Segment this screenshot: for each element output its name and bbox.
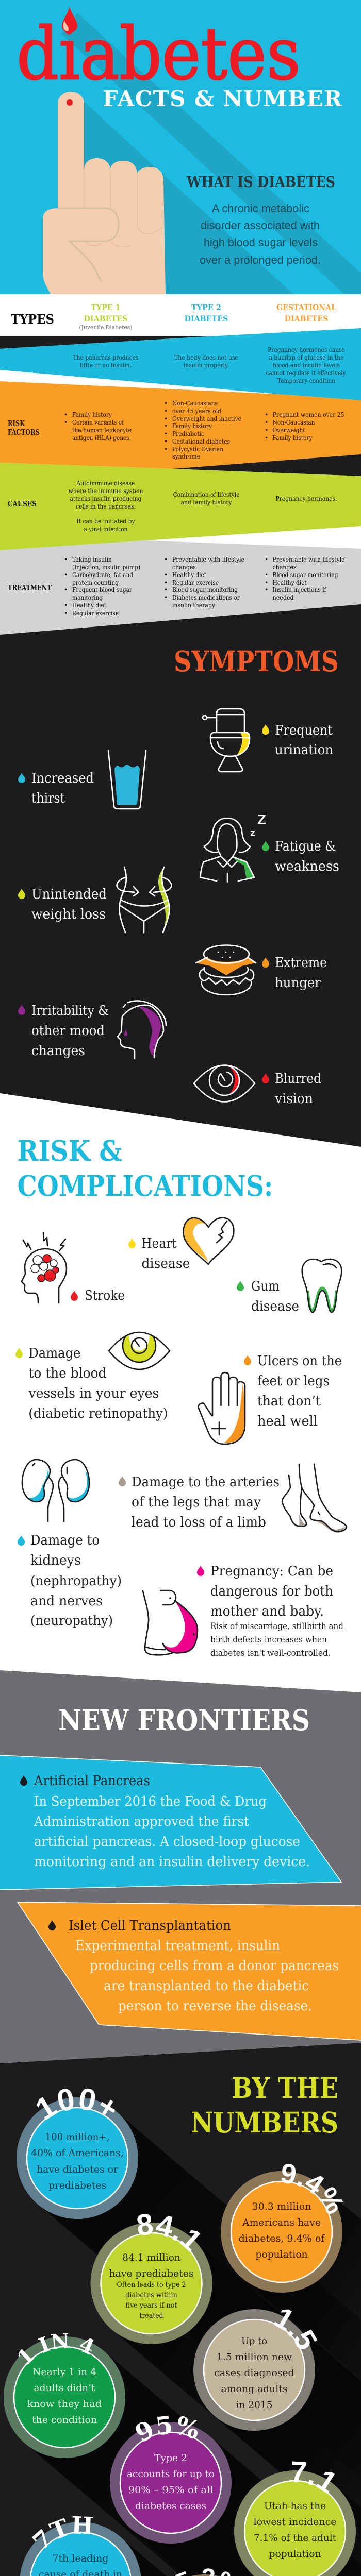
row: treatment: Diabetes medications or [172, 594, 240, 601]
row: risk factors: Gestational diabetes [172, 437, 230, 445]
symptom: blurred vision [262, 1071, 321, 1107]
row: risk factors: • [164, 415, 168, 422]
row: treatment: Carbohydrate, fat and [72, 571, 133, 579]
stat: 9.4%: Americans have [242, 2217, 321, 2228]
complication: damage to kidneys: kidneys [30, 1553, 81, 1568]
row: treatment: • [64, 601, 68, 609]
row label: treatment: TREATMENT [8, 583, 52, 592]
callout: islet cell transplantation: are transplanted to the diabetic [104, 1978, 309, 1994]
row: risk factors: over 45 years old [172, 407, 221, 415]
complication: damage to kidneys: Damage to [30, 1533, 100, 1548]
row: risk factors: • [164, 445, 168, 453]
stat: 1.5: 1.5 [273, 2309, 318, 2349]
row: risk factors: • [164, 430, 168, 437]
icon: burger [196, 945, 256, 995]
callout: islet cell transplantation [18, 1902, 361, 2040]
symptom: irritability: other mood [31, 1023, 105, 1039]
row: treatment: • [265, 571, 268, 579]
row label: risk factors: RISK [8, 419, 25, 428]
row: treatment: Preventable with lifestyle [172, 555, 244, 563]
text block: definition: A chronic metabolic [212, 202, 309, 215]
row: definition of each type: Pregnancy hormones cause [268, 346, 345, 353]
callout: islet cell transplantation: producing cells from a donor pancreas [90, 1958, 339, 1974]
row: treatment: changes [273, 563, 297, 571]
row: risk factors: • [64, 411, 68, 418]
row: risk factors: • [164, 437, 168, 445]
icon: pregnant woman [143, 1590, 198, 1655]
complication: damage to kidneys: and nerves [30, 1594, 103, 1609]
complication: pregnancy: dangerous for both [210, 1584, 333, 1599]
callout: artificial pancreas: artificial pancreas. A closed-loop glucose [34, 1834, 300, 1850]
stat: 7th [20, 2516, 141, 2576]
symptom: blurred vision: Blurred [275, 1071, 321, 1087]
stat: 95%: 90% – 95% of all [128, 2484, 214, 2496]
complication: retinopathy: (diabetic retinopathy) [28, 1406, 168, 1421]
complication: pregnancy [197, 1564, 343, 1658]
symptom: increased thirst: Increased [31, 771, 94, 786]
row: causes: cells in the pancreas. [76, 502, 136, 510]
stat: 9.4%: diabetes, 9.4% of [238, 2233, 325, 2244]
complication: damage to arteries: lead to loss of a limb [132, 1515, 266, 1530]
row: risk factors: Family history [72, 411, 112, 418]
subtitle: FACTS & NUMBER [103, 86, 342, 111]
stat: 95% [110, 2415, 232, 2544]
icon: tired woman: z [250, 827, 255, 839]
complication: gum disease: disease [251, 1299, 299, 1314]
row: treatment: Regular exercise [72, 609, 119, 617]
icon: waist [117, 867, 171, 933]
stat: 1 in 4: 1 IN 4 [19, 2333, 94, 2365]
symptom: frequent urination [262, 723, 333, 758]
stat: 95%: accounts for up to [127, 2468, 215, 2480]
row: treatment: Preventable with lifestyle [273, 555, 345, 563]
heading: what is diabetes: WHAT IS DIABETES [186, 173, 335, 191]
symptom: frequent urination: urination [275, 742, 333, 758]
complication: damage to arteries [119, 1475, 280, 1530]
icon: brain and lightning [22, 1233, 67, 1303]
symptom: fatigue and weakness [262, 839, 339, 874]
complication: ulcers: that don’t [257, 1394, 321, 1409]
heading: gestational diabetes: GESTATIONAL [276, 302, 336, 312]
row: risk factors: • [164, 399, 168, 407]
stat: 95%: 95% [136, 2415, 198, 2442]
heading: type 1 diabetes: TYPE 1 [91, 302, 121, 312]
text block: definition: high blood sugar levels [204, 236, 318, 249]
row: treatment: • [164, 586, 168, 594]
panel: types table [0, 302, 361, 635]
symptom: irritability: changes [31, 1043, 85, 1059]
row: risk factors: Overweight and inactive [172, 415, 241, 422]
complication: retinopathy: to the blood [28, 1366, 106, 1381]
row: definition of each type: insulin properly. [184, 361, 229, 369]
stat: 1.5: cases diagnosed [215, 2367, 294, 2379]
circle long shadows [25, 2112, 361, 2576]
callout: artificial pancreas: monitoring and an insulin delivery device. [34, 1854, 310, 1870]
stat: 7th: 7th leading [53, 2553, 108, 2564]
row label: causes: CAUSES [8, 499, 37, 509]
row: treatment: • [265, 555, 268, 563]
stat: 95%: diabetes cases [135, 2500, 206, 2512]
row: risk factors: the human leukocyte [72, 426, 132, 434]
stat: 95%: Type 2 [154, 2452, 187, 2464]
callout: islet cell transplantation: person to reverse the disease. [118, 1998, 312, 2014]
icon: eye with retinopathy [108, 1331, 170, 1370]
stat: 1.5: in 2015 [236, 2399, 272, 2411]
row: treatment: • [164, 571, 168, 579]
complication: damage to kidneys: (neuropathy) [30, 1613, 113, 1629]
stat: 9.4% [221, 2164, 343, 2293]
row: definition of each type: cannot regulate it effectively. [266, 369, 347, 377]
complication: pregnancy: birth defects increases when [210, 1635, 327, 1645]
stat: 7.1 [234, 2462, 356, 2576]
row: risk factors: Polycystic Ovarian [172, 445, 223, 453]
complication: retinopathy: Damage [28, 1346, 80, 1361]
symptom: frequent urination: Frequent [275, 723, 333, 738]
symptom: increased thirst [18, 771, 94, 806]
complication: damage to kidneys: (nephropathy) [30, 1573, 122, 1589]
callout: artificial pancreas: In September 2016 the Food & Drug [34, 1794, 267, 1809]
row label: risk factors [8, 419, 40, 437]
row: definition of each type: The pancreas produces [73, 353, 138, 361]
row: treatment: Taking insulin [72, 555, 112, 563]
complication: damage to kidneys [18, 1533, 122, 1629]
symptom: irritability: Irritability & [31, 1003, 109, 1019]
row: causes: and family history [180, 498, 232, 506]
symptom: extreme hunger: Extreme [275, 955, 327, 971]
panel: risk and complications [15, 1134, 347, 1658]
row: treatment: needed [273, 594, 294, 601]
stat: 100+: 40% of Americans, [31, 2147, 124, 2159]
callout: islet cell transplantation: Islet Cell Transplantation [69, 1918, 231, 1934]
icon: drop highlight [63, 21, 69, 31]
stat: 100+: 100+ [36, 2089, 116, 2121]
heading: new frontiers: NEW FRONTIERS [58, 1703, 310, 1737]
row: definition of each type: Temporary condition [277, 377, 335, 384]
stat: 1 in 4 [4, 2333, 125, 2458]
icon: hand with ulcer [199, 1372, 245, 1444]
complication: heart disease [128, 1236, 190, 1272]
row: risk factors: • [64, 418, 68, 426]
row: risk factors: syndrome [172, 452, 200, 460]
stat: 84.1: 84.1 [137, 2214, 200, 2252]
row: risk factors: Non-Caucasians [172, 399, 218, 407]
callout: artificial pancreas: Artificial Pancreas [34, 1773, 150, 1789]
stat: 9.4%: 9.4% [282, 2164, 343, 2214]
complication: retinopathy: vessels in your eyes [28, 1386, 159, 1401]
panel: by the numbers [0, 2043, 361, 2576]
complication: damage to arteries: Damage to the arteries [132, 1475, 280, 1490]
text block: definition [200, 202, 321, 266]
stat: 1 in 4: adults didn’t [34, 2382, 95, 2394]
row: treatment: Insulin injections if [273, 586, 327, 594]
heading: type 1 diabetes [79, 302, 132, 331]
stat: 15.2% [175, 2568, 230, 2576]
row: treatment: monitoring [72, 594, 103, 601]
stat: 84.1: diabetes within [125, 2291, 177, 2299]
row: treatment: insulin therapy [172, 601, 216, 609]
row: definition of each type [73, 346, 347, 384]
symptom: extreme hunger: hunger [275, 975, 321, 991]
icon: hand with pricked finger [43, 92, 166, 294]
row: risk factors: • [164, 407, 168, 415]
row: treatment: • [164, 579, 168, 586]
symptom: fatigue and weakness: Fatigue & [275, 839, 336, 854]
icon: blurred eye [194, 1065, 255, 1101]
row: treatment: changes [172, 563, 196, 571]
symptom: blurred vision: vision [274, 1091, 313, 1107]
row: treatment: • [64, 609, 68, 617]
text block: definition: disorder associated with [201, 219, 320, 232]
icon: head with tear [118, 1001, 166, 1059]
callout: artificial pancreas [0, 1755, 341, 1890]
row: risk factors: • [265, 426, 268, 434]
complication: gum disease [237, 1279, 299, 1314]
icon: toilet [203, 709, 250, 772]
stat: 84.1: 84.1 million [122, 2252, 180, 2263]
stat: 7.1: lowest incidence [254, 2516, 336, 2528]
row: risk factors: Certain variants of [72, 418, 124, 426]
row: causes: where the immune system [68, 487, 143, 495]
heading: risk and complications [18, 1134, 273, 1202]
row: causes: Combination of lifestyle [173, 490, 239, 498]
panel: symptoms [0, 604, 361, 1147]
icon: tooth [302, 1259, 341, 1312]
stat: 9.4%: 30.3 million [252, 2201, 311, 2212]
row: risk factors: • [265, 411, 268, 418]
row: definition of each type: The body does not use [174, 353, 238, 361]
icon: tired woman [200, 811, 266, 882]
row: treatment: Healthy diet [273, 579, 307, 586]
complication: ulcers: Ulcers on the [257, 1353, 342, 1369]
complication: pregnancy: diabetes isn't well-controlled. [210, 1648, 331, 1658]
row: risk factors: • [164, 422, 168, 430]
complication: pregnancy: Risk of miscarriage, stillbirth and [210, 1621, 343, 1632]
row: causes [68, 479, 337, 533]
row: treatment: Frequent blood sugar [72, 586, 132, 594]
complication: gum disease: Gum [251, 1279, 280, 1294]
symptom: fatigue and weakness: weakness [275, 859, 339, 874]
stat: 7.1: 7.1% of the adult [254, 2532, 336, 2544]
row: treatment: Regular exercise [172, 579, 219, 586]
heading: by the numbers: NUMBERS [191, 2106, 338, 2139]
stat: 9.4%: population [256, 2249, 307, 2260]
complication: stroke [71, 1288, 125, 1303]
row: treatment: • [164, 555, 168, 563]
heading: risk and complications: RISK & [18, 1134, 122, 1167]
complication: ulcers [244, 1353, 342, 1429]
row: treatment: • [265, 579, 268, 586]
stat: 7th: 7TH [32, 2516, 93, 2548]
complication: pregnancy: Pregnancy: Can be [210, 1564, 333, 1579]
symptom: irritability [18, 1003, 109, 1059]
label: types: TYPES [11, 312, 54, 327]
heading: symptoms: SYMPTOMS [174, 645, 339, 678]
symptom: unintended weight loss: weight loss [31, 907, 106, 922]
panel: new frontiers [0, 1670, 361, 2063]
row: risk factors: Family history [273, 434, 313, 442]
heading: type 1 diabetes: DIABETES [84, 314, 128, 324]
row: risk factors: • [265, 418, 268, 426]
row: causes: It can be initiated by [76, 517, 135, 525]
row: risk factors: Overweight [273, 426, 305, 434]
stat: 1.5: 1.5 million new [217, 2351, 292, 2363]
complication: heart disease: disease [141, 1256, 190, 1272]
heading: risk and complications: COMPLICATIONS: [18, 1169, 273, 1202]
stat: 1 in 4: know they had [27, 2398, 102, 2410]
row: treatment: • [164, 594, 168, 601]
complication: damage to arteries: of the legs that may [132, 1495, 261, 1510]
icon: broken heart [184, 1218, 234, 1264]
row: risk factors: • [265, 434, 268, 442]
stat: 1.5: among adults [221, 2383, 288, 2395]
symptom: unintended weight loss: Unintended [31, 887, 107, 902]
row: definition of each type: blood and insulin levels [273, 361, 340, 369]
stat: 7.1: Utah has the [264, 2500, 326, 2512]
stat: 100+: 100 million+, [45, 2131, 109, 2143]
row: treatment: Blood sugar monitoring [172, 586, 238, 594]
stat: 84.1: five years if not [126, 2301, 177, 2310]
row: treatment: • [64, 555, 68, 563]
row: risk factors: Pregnant women over 25 [273, 411, 344, 418]
complication: heart disease: Heart [141, 1236, 177, 1251]
icon: blood drop [62, 7, 77, 33]
stat: 84.1: have prediabetes [109, 2268, 194, 2279]
stat: 7.1: 7.1 [292, 2462, 335, 2494]
stat: 100+ [17, 2089, 138, 2219]
row: causes: Pregnancy hormones. [275, 495, 337, 502]
heading: gestational diabetes [276, 302, 336, 324]
panel: hero [0, 0, 361, 294]
heading: gestational diabetes: DIABETES [285, 314, 328, 324]
stat: 1 in 4: the condition [32, 2414, 97, 2426]
row: risk factors: Non-Caucasian [273, 418, 315, 426]
complication: ulcers: heal well [257, 1414, 318, 1429]
heading: by the numbers [191, 2071, 338, 2139]
row: causes: Autoimmune disease [76, 479, 135, 487]
symptom: unintended weight loss [18, 887, 107, 922]
icon: glass of water [108, 751, 146, 809]
row: treatment: Healthy diet [172, 571, 206, 579]
stat: 1.5: Up to [241, 2335, 267, 2347]
row: treatment: (Injection, insulin pump) [72, 563, 140, 571]
text block: definition: over a prolonged period. [200, 253, 321, 266]
title: diabetes: diabetes [17, 12, 301, 96]
icon: kidneys [22, 1460, 90, 1521]
stat: 1 in 4: Nearly 1 in 4 [32, 2366, 96, 2378]
symptom: extreme hunger [262, 955, 327, 991]
complication: pregnancy: mother and baby. [210, 1604, 324, 1619]
row: treatment: • [64, 586, 68, 594]
heading: type 2 diabetes: DIABETES [185, 314, 228, 324]
stat: 84.1: treated [139, 2312, 163, 2320]
stat: 1.5 [193, 2309, 318, 2431]
icon: legs [282, 1464, 347, 1532]
complication: stroke: Stroke [85, 1288, 125, 1303]
symptom: increased thirst: thirst [31, 791, 65, 806]
callout: artificial pancreas: Administration approved the first [34, 1814, 250, 1829]
stat: 84.1 [91, 2214, 212, 2344]
complication: retinopathy [15, 1346, 168, 1421]
callout: islet cell transplantation: Experimental treatment, insulin [75, 1938, 280, 1954]
row: causes: attacks insulin-producing [70, 495, 141, 502]
heading: type 2 diabetes [185, 302, 228, 324]
row: risk factors: Prediabetic [172, 430, 204, 437]
row: risk factors: Family history [172, 422, 212, 430]
stat: 100+: have diabetes or [37, 2164, 119, 2175]
row: treatment [64, 555, 345, 617]
row: definition of each type: a buildup of glucose in the [269, 353, 343, 361]
row: risk factors: antigen (HLA) genes. [72, 434, 131, 442]
row: treatment: Healthy diet [72, 601, 106, 609]
row: risk factors [64, 399, 344, 460]
row: treatment: • [265, 586, 268, 594]
row: causes: a viral infection [84, 525, 128, 533]
row label: risk factors: FACTORS [8, 428, 40, 437]
stat: 84.1: Often leads to type 2 [117, 2281, 186, 2289]
heading: by the numbers: BY THE [232, 2071, 338, 2105]
row: treatment: Blood sugar monitoring [273, 571, 338, 579]
heading: type 2 diabetes: TYPE 2 [191, 302, 221, 312]
heading: type 1 diabetes: (Juvenile Diabetes) [79, 324, 132, 331]
row: treatment: • [64, 571, 68, 579]
row: treatment: protein counting [72, 579, 119, 586]
stat: 100+: prediabetes [48, 2180, 106, 2191]
complication: ulcers: feet or legs [257, 1374, 330, 1389]
stat: 7.1: population [269, 2548, 321, 2560]
icon: tired woman: Z [257, 811, 266, 827]
row: definition of each type: little or no Insulin. [80, 361, 132, 369]
